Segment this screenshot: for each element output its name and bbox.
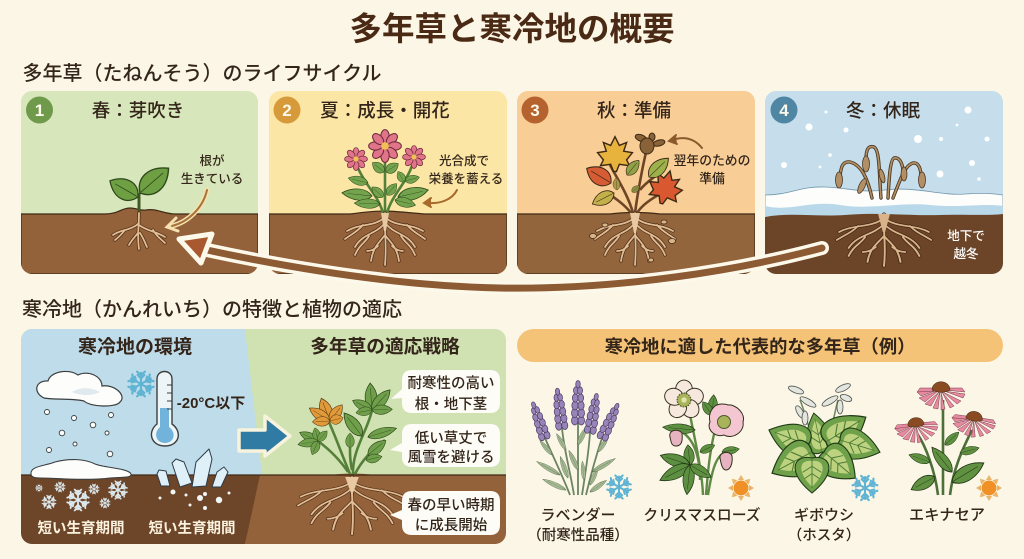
badge 1: 1: [35, 101, 44, 120]
arrow: to leaves: [424, 190, 457, 207]
icon: snowflake hosta: [853, 476, 877, 500]
plant: hosta: [763, 382, 884, 493]
label: echinacea: エキナセア: [909, 507, 985, 524]
label: hosta: [788, 507, 860, 544]
flower: pink hellebore: [709, 404, 744, 437]
label: lavender: [527, 506, 629, 544]
note: photosynthesis: 栄養を蓄える: [429, 171, 503, 186]
icon: seed head: [634, 133, 666, 154]
ground: summer: [269, 211, 507, 274]
icon: adapted plant: [297, 383, 398, 474]
badge 3: 3: [530, 101, 540, 120]
note: photosynthesis: [429, 153, 503, 186]
heading: spring: 春：芽吹き: [92, 100, 184, 121]
icon: sun christmas rose: [728, 475, 754, 501]
icon: snow drift: [31, 460, 131, 479]
banner: representative perennials: 寒冷地に適した代表的な多年草（例）: [605, 336, 915, 357]
panel side: environment: [21, 329, 262, 544]
snow falling: [781, 106, 990, 181]
note: underground: [947, 228, 985, 261]
icon: cloud: [37, 371, 122, 406]
banner: representative perennials: [517, 329, 1003, 362]
panel: summer: [269, 91, 507, 274]
badge 3: [522, 96, 548, 124]
ground: strategy: [245, 474, 506, 544]
label: lavender: （耐寒性品種）: [527, 527, 629, 544]
icon: autumn plant: [582, 133, 686, 213]
icon: snowflake lavender: [607, 475, 631, 499]
heading: environment: 寒冷地の環境: [78, 336, 192, 358]
icon: sun echinacea: [976, 475, 1002, 501]
panel: autumn: [517, 91, 755, 274]
ground: environment: [21, 475, 260, 544]
falling snow: [44, 410, 114, 457]
flower buds: [670, 430, 732, 470]
icon: ground frost: [36, 481, 127, 510]
callout: hardy roots: [391, 370, 500, 413]
heading: summer: 夏：成長・開花: [320, 100, 450, 121]
ground: winter: [765, 214, 1003, 274]
callout: hardy roots: 根・地下茎: [415, 396, 487, 413]
callout: low height: 低い草丈で: [415, 430, 487, 447]
arrow: to roots: [167, 190, 207, 231]
note: preparation: 準備: [699, 171, 725, 186]
note: photosynthesis: 光合成で: [439, 153, 489, 168]
roots: winter: [837, 214, 931, 266]
ground: spring: [21, 208, 258, 274]
callout: low height: [390, 424, 500, 467]
arrow: cycle return: [179, 234, 822, 288]
note: preparation: [674, 153, 750, 186]
arrow: to seed head: [669, 135, 702, 148]
panel: winter: [765, 91, 1003, 274]
roots: summer: [345, 213, 425, 265]
note: roots alive: 根が: [199, 153, 225, 168]
callout: hardy roots: 耐寒性の高い: [408, 375, 494, 392]
label: hosta: （ホスタ）: [788, 527, 860, 544]
panel: cold environment and strategy: [21, 329, 506, 544]
label: short growing period 2: 短い生育期間: [148, 519, 236, 537]
label: christmas rose: クリスマスローズ: [643, 506, 761, 524]
plant: echinacea: [894, 382, 997, 495]
heading: strategy: 多年草の適応戦略: [310, 336, 460, 357]
heading: winter: 冬：休眠: [846, 100, 920, 121]
icon: thermometer: [151, 372, 178, 446]
badge 2: [274, 96, 300, 124]
seeds in soil: [590, 220, 676, 262]
label: lavender: ラベンダー: [540, 506, 616, 524]
arrow: environment to strategy: [239, 416, 290, 456]
heading: autumn: 秋：準備: [597, 100, 671, 121]
ground: autumn: [517, 212, 755, 274]
callout: low height: 風雪を避ける: [408, 449, 494, 466]
icon: summer plant: [341, 130, 430, 213]
callout: early growth: 春の早い時期: [408, 496, 494, 514]
note: underground: 越冬: [953, 246, 979, 261]
icon: snowflake: [128, 372, 154, 396]
snow layer: [765, 186, 1003, 208]
plant: christmas rose: [657, 380, 744, 495]
callout: early growth: に成長開始: [415, 517, 488, 534]
note: underground: 地下で: [947, 228, 985, 243]
label: temperature: -20°C以下: [177, 395, 245, 412]
note: roots alive: 生きている: [181, 172, 243, 186]
badge 4: 4: [779, 101, 789, 120]
heading: life cycle: 多年草（たねんそう）のライフサイクル: [22, 62, 382, 85]
title: 多年草と寒冷地の概要: [349, 11, 675, 47]
note: preparation: 翌年のための: [674, 153, 750, 168]
badge 2: 2: [282, 101, 292, 120]
callout: early growth: [390, 491, 500, 535]
icon: spring sprout: [109, 167, 170, 212]
icon: withered plant: [836, 147, 926, 198]
roots: autumn: [595, 213, 675, 265]
panel: spring: [21, 91, 258, 274]
badge 1: [26, 96, 53, 124]
roots: adapted plant: [298, 477, 406, 534]
note: roots alive: [181, 153, 243, 186]
label: short growing period 1: 短い生育期間: [38, 519, 124, 537]
heading: cold regions: 寒冷地（かんれいち）の特徴と植物の適応: [22, 298, 402, 321]
badge 4: [770, 96, 798, 124]
roots: spring: [113, 213, 165, 249]
label: hosta: ギボウシ: [794, 507, 854, 524]
plant: lavender: [527, 380, 623, 495]
icon: ice crystals: [157, 449, 230, 510]
